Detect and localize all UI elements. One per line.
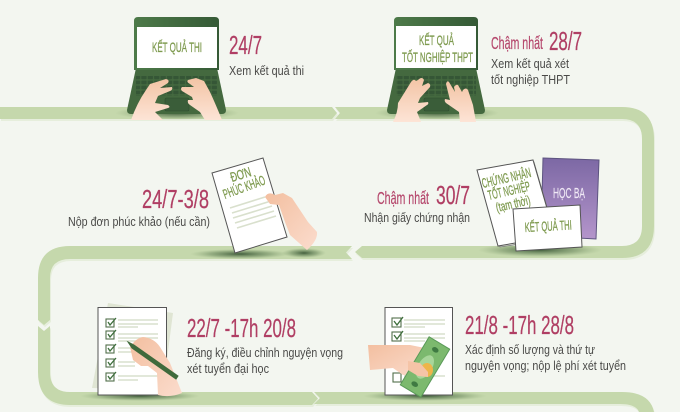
step 6: checklist with hand paying money [363,308,487,401]
description: step 2: Xem kết quả xét [491,57,569,71]
checklist rows [404,320,445,380]
date: chậm nhất 30/7: Chậm nhất [377,188,429,208]
step 4: stack of documents: HỌC BẠ [553,185,585,202]
banknote [400,337,450,397]
step 2: laptop with graduation results: TỐT NGHIỆP THPT [402,48,473,65]
step 4: stack of documents: (tạm thời) [494,192,532,215]
step 4: stack of documents: CHỨNG NHẬN [480,165,532,191]
coin [421,363,433,377]
step 3: review application form held by hand [190,158,326,259]
description: step 3: Nộp đơn phúc khảo (nếu cần) [68,215,210,229]
step 4: stack of documents [477,158,602,257]
laptop body [127,68,226,114]
description: step 6: nguyện vọng; nộp lệ phí xét tuyển [465,359,626,373]
shadow [80,391,200,401]
exam result sheet [513,205,582,251]
date: 21/8 - 17h 28/8: 21/8 -17h 28/8 [465,310,574,340]
date: 22/7 - 17h 20/8: 22/7 -17h 20/8 [187,313,296,343]
date: chậm nhất 30/7 [377,180,470,210]
form lines [230,197,276,228]
form title: ĐƠN [228,164,253,185]
step 1: laptop with exam results [115,17,239,120]
back sheet [92,303,173,390]
shadow [478,243,602,257]
pen [128,342,178,379]
form [212,158,287,253]
description: step 2: tốt nghiệp THPT [491,73,570,87]
date: chậm nhất 30/7: 30/7 [436,180,470,210]
description: step 4: Nhận giấy chứng nhận [364,211,470,225]
shadow [363,391,487,401]
left hand [131,79,172,120]
temporary graduation certificate [478,162,556,247]
thumb [408,361,428,377]
right hand [445,81,476,122]
description: step 5: Đăng ký, điều chỉnh nguyện vọng [187,346,343,360]
date: chậm nhất 28/7: Chậm nhất [491,33,543,53]
step 4: stack of documents: TỐT NGHIỆP [486,179,532,203]
description: step 1: Xem kết quả thi [229,64,304,78]
sheet [385,308,452,395]
form title [221,164,267,202]
date: chậm nhất 28/7: 28/7 [549,26,582,56]
left hand [393,78,430,122]
screen label: KẾT QUẢ THI [152,39,202,55]
date: 24/7: 24/7 [229,30,262,60]
sheet [98,308,166,395]
description: step 6: Xác định số lượng và thứ tự [465,343,595,357]
description: step 5: xét tuyển đại học [187,362,269,376]
hand [265,193,317,250]
hand [130,337,182,396]
step 2: laptop with graduation results [375,17,499,122]
laptop body [387,68,485,114]
form title: PHÚC KHẢO [221,173,267,202]
screen label: KẾT QUẢ [419,32,454,48]
hand [368,345,428,377]
description: step 6 [465,343,626,373]
date: chậm nhất 28/7 [491,26,582,56]
step 4: stack of documents: KẾT QUẢ THI [524,218,572,235]
shadows [190,249,290,259]
description: step 5 [187,346,343,376]
description: step 2 [491,57,570,87]
checklist rows [118,320,158,380]
timeline path [0,107,655,412]
shadow [115,106,239,120]
shadow [375,106,499,120]
date: 24/7-3/8: 24/7-3/8 [142,184,209,214]
step 5: checklist with hand writing [80,303,200,401]
right hand [181,78,222,120]
school record book [541,158,599,239]
